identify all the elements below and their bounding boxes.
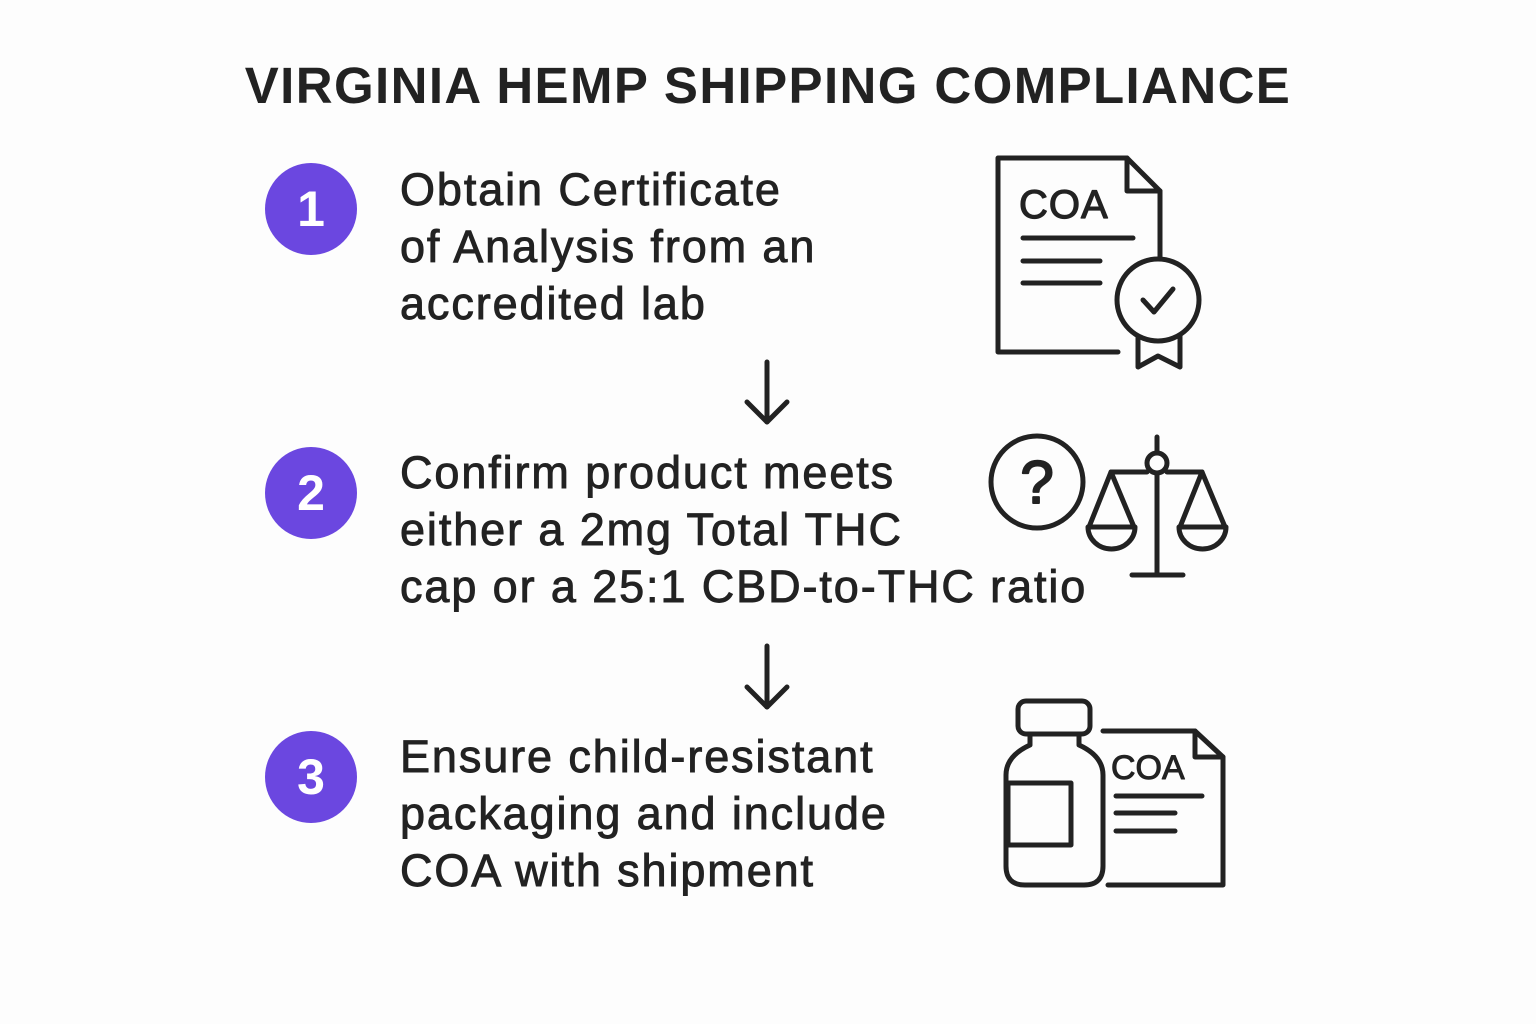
step 3 text <box>400 731 888 896</box>
step 1 text: accredited lab <box>400 278 707 329</box>
step 1 text <box>400 164 816 329</box>
arrow 2 <box>747 646 787 707</box>
step 3 text: COA with shipment <box>400 845 815 896</box>
step 1 number: 1 <box>297 181 325 237</box>
step 1 text: Obtain Certificate <box>400 164 782 215</box>
step 1 number <box>265 163 357 255</box>
icon: question mark: ? <box>1020 449 1054 516</box>
title: VIRGINIA HEMP SHIPPING COMPLIANCE <box>245 57 1291 114</box>
step 2 text: either a 2mg Total THC <box>400 504 903 555</box>
step 2 text: cap or a 25:1 CBD-to-THC ratio <box>400 561 1087 612</box>
step 1 text: of Analysis from an <box>400 221 816 272</box>
icon: question mark <box>991 436 1083 528</box>
icon: COA certificate with badge <box>998 158 1199 367</box>
icon: bottle with COA: COA <box>1111 749 1185 787</box>
step 2 text: Confirm product meets <box>400 447 895 498</box>
step 3 text: packaging and include <box>400 788 888 839</box>
icon: COA certificate with badge: COA <box>1019 183 1109 227</box>
step 2 text <box>400 447 1087 612</box>
step 2 number: 2 <box>297 465 325 521</box>
step 3 number: 3 <box>297 749 325 805</box>
step 3 text: Ensure child-resistant <box>400 731 874 782</box>
arrow 1 <box>747 362 787 422</box>
step 2 number <box>265 447 357 539</box>
icon: bottle with COA <box>1006 701 1223 885</box>
step 3 number <box>265 731 357 823</box>
icon: scales <box>1088 437 1226 575</box>
